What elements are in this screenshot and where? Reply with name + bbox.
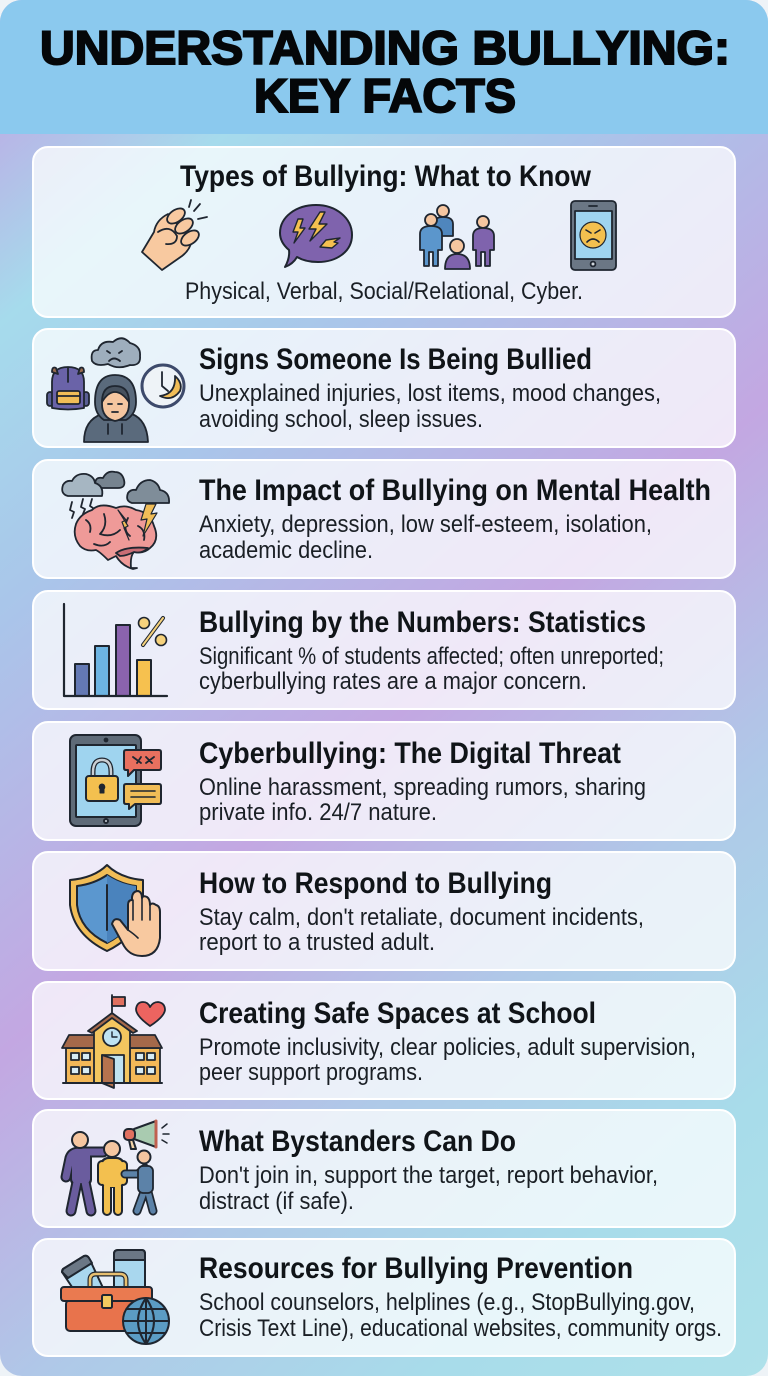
heading: resources: Resources for Bullying Prevention xyxy=(199,1252,633,1285)
icon: toolkit, phones and globe xyxy=(61,1250,169,1344)
title: UNDERSTANDING BULLYING: xyxy=(40,21,730,74)
body: resources: School counselors, helplines (e.g., StopBullying.gov, xyxy=(199,1289,695,1316)
icon: group of people xyxy=(420,205,494,269)
panel: types of bullying xyxy=(33,147,735,317)
icon: sad hooded teen, backpack, cloud and clock xyxy=(47,338,184,442)
body: respond: Stay calm, don't retaliate, document incidents, xyxy=(199,904,644,931)
icon: shield and raised hand xyxy=(70,865,160,956)
body: signs: avoiding school, sleep issues. xyxy=(199,406,483,433)
body: statistics xyxy=(199,643,664,695)
body: signs xyxy=(199,380,661,433)
body: cyberbullying xyxy=(199,774,646,826)
body: types: Physical, Verbal, Social/Relational, Cyber. xyxy=(185,278,583,305)
heading: respond: How to Respond to Bullying xyxy=(199,867,552,900)
panel: resources xyxy=(33,1239,735,1356)
body: safe spaces: Promote inclusivity, clear policies, adult supervision, xyxy=(199,1034,696,1061)
icon: speech bubble xyxy=(280,205,352,267)
icon: brain with storm clouds xyxy=(62,472,169,569)
heading: mental health: The Impact of Bullying on Mental Health xyxy=(199,474,711,507)
panel: how to respond xyxy=(33,852,735,970)
title: KEY FACTS xyxy=(254,69,516,122)
icon: tablet with lock and chat bubbles xyxy=(70,735,161,826)
body: safe spaces: peer support programs. xyxy=(199,1059,423,1086)
panel: safe spaces xyxy=(33,982,735,1099)
body: respond xyxy=(199,904,644,956)
body: respond: report to a trusted adult. xyxy=(199,929,435,956)
icon: school with flag and heart xyxy=(62,995,165,1088)
panel: bystanders xyxy=(33,1110,735,1227)
icon: bystanders and megaphone xyxy=(66,1121,169,1211)
body: mental health xyxy=(199,511,652,564)
body: signs: Unexplained injuries, lost items, mood changes, xyxy=(199,380,661,407)
panel: signs xyxy=(33,329,735,447)
icon: phone with angry face xyxy=(571,201,616,270)
body: bystanders: Don't join in, support the target, report behavior, xyxy=(199,1162,658,1189)
body: cyberbullying: private info. 24/7 nature. xyxy=(199,799,437,826)
panel: mental health xyxy=(33,460,735,578)
body: safe spaces xyxy=(199,1034,696,1086)
header banner xyxy=(0,0,768,134)
heading: safe spaces: Creating Safe Spaces at School xyxy=(199,997,596,1030)
title xyxy=(42,30,726,114)
body: resources xyxy=(199,1289,722,1342)
bar chart icon xyxy=(64,604,167,696)
heading: bystanders: What Bystanders Can Do xyxy=(199,1125,516,1158)
body: mental health: Anxiety, depression, low self-esteem, isolation, xyxy=(199,511,652,538)
panel: statistics xyxy=(33,591,735,709)
body: mental health: academic decline. xyxy=(199,537,373,564)
body: statistics: cyberbullying rates are a major concern. xyxy=(199,668,587,695)
body: cyberbullying: Online harassment, spreading rumors, sharing xyxy=(199,774,646,801)
heading: statistics: Bullying by the Numbers: Statistics xyxy=(199,606,646,639)
body: statistics: Significant % of students affected; often unreported; xyxy=(199,643,664,670)
panel: cyberbullying xyxy=(33,722,735,840)
heading: signs: Signs Someone Is Being Bullied xyxy=(199,343,592,376)
heading: types: Types of Bullying: What to Know xyxy=(180,160,592,193)
heading: cyberbullying: Cyberbullying: The Digital Threat xyxy=(199,737,621,770)
body: bystanders xyxy=(199,1162,658,1215)
icon: fist xyxy=(142,200,207,270)
body: bystanders: distract (if safe). xyxy=(199,1188,354,1215)
